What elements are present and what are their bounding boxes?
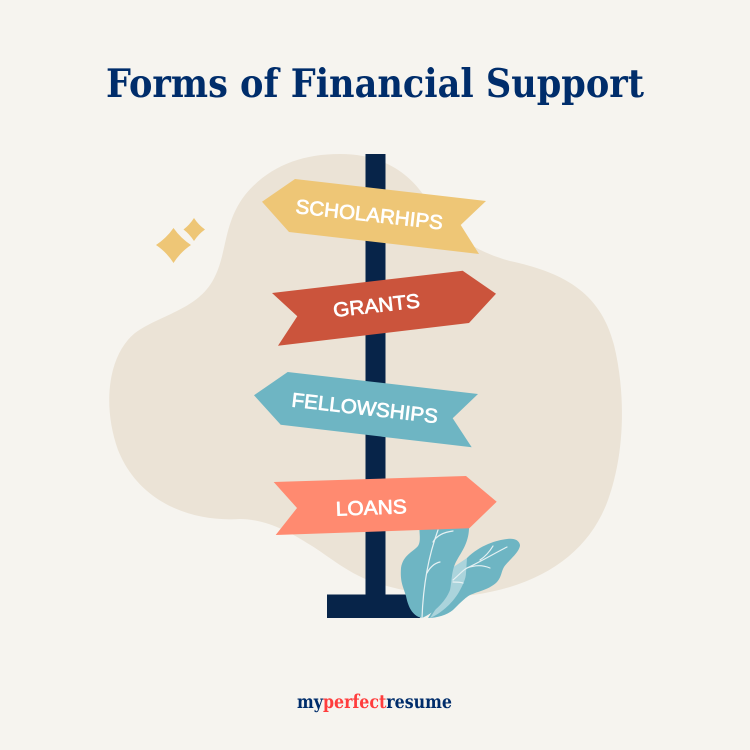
left leaf <box>401 522 469 618</box>
sign: loans <box>274 476 497 535</box>
title: Forms of Financial Support <box>106 61 644 107</box>
sign: grants: GRANTS <box>332 290 421 322</box>
sparkles icon <box>156 218 205 263</box>
background blob <box>109 154 622 596</box>
sign: loans: LOANS <box>335 496 407 521</box>
sign: fellowships: FELLOWSHIPS <box>290 390 439 428</box>
sign: scholarships: SCHOLARHIPS <box>294 196 444 234</box>
signpost pole <box>327 154 420 618</box>
plant <box>401 522 520 618</box>
sign: grants <box>272 271 496 346</box>
sign: fellowships <box>254 372 478 447</box>
sign: scholarships <box>262 179 486 254</box>
logo: myperfectresume <box>297 691 452 713</box>
light leaf section <box>430 558 467 618</box>
right leaf <box>428 539 520 618</box>
leaf veins <box>422 530 507 618</box>
